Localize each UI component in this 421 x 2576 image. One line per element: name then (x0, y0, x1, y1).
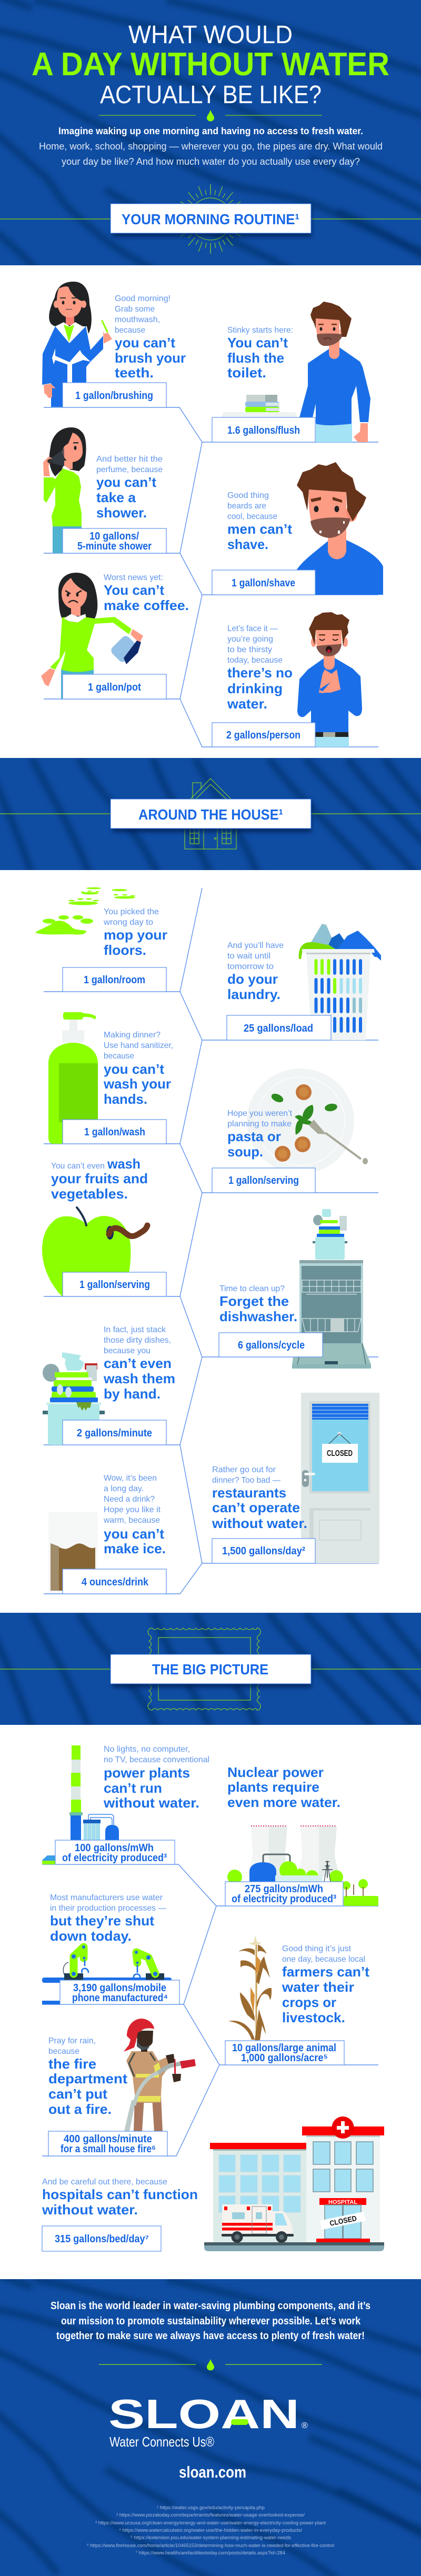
text: mop your floors (103, 907, 167, 958)
heading: around the house (111, 799, 311, 828)
text: take a shower: And better hit the (96, 455, 163, 464)
box: 1 gallon per serving, fruit: 1 gallon/serving (79, 1279, 150, 1291)
title: A DAY WITHOUT WATER (32, 46, 389, 83)
logo: Sloan: ® (302, 2421, 308, 2430)
text: restaurants can't operate: without water. (212, 1515, 307, 1531)
text: fire department: the fire (48, 2056, 96, 2072)
illustration: man with patchy beard (293, 462, 383, 595)
divider with water drop (99, 2359, 322, 2371)
illustration: man with toilet tank and books (222, 302, 370, 442)
text: brush your teeth (115, 294, 186, 381)
text: wash dishes by hand: wash them (103, 1371, 175, 1386)
illustration: dried corn stalk (228, 1935, 272, 2041)
box: 2 gallons per person: 2 gallons/person (226, 730, 300, 741)
text: flush the toilet: flush the (227, 350, 284, 366)
text: forget the dishwasher: dishwasher. (219, 1309, 297, 1324)
text: restaurants can't operate (212, 1465, 307, 1531)
text: men can't shave: beards are (227, 502, 266, 511)
connector lines (44, 888, 378, 1594)
text: hospitals can't function: And be careful out there, because (42, 2178, 167, 2186)
box: 4 ounces per drink (63, 1569, 166, 1594)
text: fire department: can’t put (48, 2086, 107, 2102)
intro text (39, 126, 383, 167)
text: no drinking water: you’re going (227, 635, 273, 644)
text: nuclear plants: plants require (227, 1779, 319, 1795)
box: 315 gallons per bed per day (42, 2226, 161, 2251)
box: 400 gallons per minute (48, 2131, 167, 2156)
text: no drinking water (227, 624, 293, 712)
text: mop your floors: wrong day to (103, 918, 153, 927)
text: fire department: Pray for rain, (48, 2036, 96, 2045)
panel: footer (0, 2274, 421, 2576)
closing statement: Sloan is the world leader in water-saving plumbing components, and it’s (51, 2300, 370, 2312)
text: brush your teeth: brush your (115, 350, 186, 366)
text: brush your teeth: teeth. (115, 365, 154, 381)
footnote sources: ¹ https://water.usgs.gov/edu/activity-percapita.php (157, 2505, 265, 2511)
illustration: closed hospital and ambulance: CLOSED (329, 2214, 357, 2228)
text: restaurants can't operate: can’t operate (212, 1500, 300, 1515)
text: do your laundry: And you’ll have (227, 941, 284, 950)
text: restaurants can't operate: restaurants (212, 1485, 286, 1501)
box: 1 gallon per serving, fruit (63, 1272, 166, 1296)
illustration: woman with perfume (43, 427, 86, 553)
box: 100 gallons per mWh: of electricity produced³ (62, 1852, 167, 1864)
box: 1 gallon per room: 1 gallon/room (84, 974, 145, 986)
text: fire department: out a fire. (48, 2101, 112, 2117)
connector lines (44, 407, 378, 747)
text: power plants can't run: without water. (103, 1795, 199, 1811)
text: power plants can't run (103, 1745, 209, 1811)
text: can't make ice: make ice. (104, 1541, 166, 1556)
text: wash fruit and vegetables: vegetables. (51, 1186, 128, 1202)
text: flush the toilet (227, 326, 293, 381)
box: 2 gallons per minute: 2 gallons/minute (77, 1427, 152, 1439)
box: 4 ounces per drink: 4 ounces/drink (82, 1576, 149, 1588)
footnote sources: ³ https://www.ucsusa.org/clean-energy/energy-and-water-use/water-energy-electricity-cooling-power-plant (95, 2520, 326, 2526)
text: no drinking water: drinking (227, 681, 283, 696)
box: 3,190 gallons per phone (60, 1980, 179, 2004)
panel: the big picture banner (0, 1613, 421, 1729)
footnote sources: ⁴ https://www.watercalculator.org/water-use/the-hidden-water-in-everyday-products/ (119, 2528, 302, 2533)
text: hospitals can't function (42, 2178, 198, 2218)
illustration: dishwasher (292, 1209, 371, 1369)
text: take a shower (96, 455, 163, 521)
text: manufacturers shut down: Most manufacturers use water (50, 1893, 163, 1902)
text: do your laundry: laundry. (227, 986, 280, 1002)
illustration: stack of dirty dishes in pot (43, 1352, 105, 1445)
box: 2 gallons per minute (63, 1420, 166, 1445)
footnote sources: ⁵ https://extension.psu.edu/water-system-planning-estimating-water-needs (131, 2535, 291, 2541)
logo: Sloan: Water Connects Us® (109, 2434, 214, 2450)
text: no drinking water: Let’s face it — (227, 624, 278, 633)
footnote sources: ⁶ https://www.firehouse.com/home/article/10465153/determining-how-much-water-is-needed-for-effective-fire-control (87, 2543, 334, 2549)
text: flush the toilet: toilet. (227, 365, 266, 381)
box: 1 gallon per pot: 1 gallon/pot (88, 682, 141, 693)
box: 275 gallons per mWh: of electricity produced³ (232, 1893, 336, 1905)
footnote sources: ⁷ https://www.healthcarefacilitiestoday.com/posts/details.aspx?id=284 (136, 2550, 285, 2556)
text: flush the toilet: You can’t (227, 335, 288, 351)
title (32, 21, 389, 109)
box: 1.6 gallons per flush: 1.6 gallons/flush (227, 425, 300, 436)
illustration: nuclear power plant (227, 1826, 378, 1906)
text: no drinking water: to be thirsty (227, 645, 272, 654)
text: make coffee: Worst news yet: (104, 573, 163, 582)
box: 1 gallon per serving, pasta: 1 gallon/serving (228, 1175, 299, 1186)
text: power plants can't run: No lights, no computer, (104, 1745, 190, 1754)
text: do your laundry: do your (227, 971, 278, 987)
box: 1 gallon per shave (212, 570, 315, 595)
box: 1 gallon per brushing: 1 gallon/brushing (75, 390, 153, 402)
text: wash dishes by hand: In fact, just stack (104, 1325, 166, 1334)
text: wash your hands: because (104, 1052, 134, 1061)
text: wash your hands: Use hand sanitizer, (104, 1041, 173, 1050)
text: wash your hands (103, 1031, 173, 1107)
box: 1.6 gallons per flush (212, 417, 315, 442)
illustration: laundry basket (299, 924, 381, 1040)
box: 1,500 gallons per day (212, 1539, 315, 1563)
text: can't make ice: warm, because (103, 1516, 160, 1525)
text: nuclear plants: even more water. (227, 1794, 340, 1810)
text: can't make ice: Need a drink? (104, 1495, 155, 1504)
icon: muddy paw prints (35, 887, 135, 935)
illustration: closed restaurant door: CLOSED (327, 1449, 353, 1458)
panel: the big picture (42, 1745, 384, 2251)
text: power plants can't run: power plants (104, 1765, 190, 1781)
text: restaurants can't operate: Rather go out for (212, 1465, 276, 1474)
text: can't make ice: a long day. (104, 1484, 144, 1493)
text: hospitals can't function: hospitals can’t function (42, 2186, 198, 2202)
illustration: soap dispenser (48, 1012, 98, 1144)
box: 275 gallons per mWh (225, 1882, 343, 1906)
text: no drinking water: there’s no (227, 665, 293, 681)
box: 1 gallon per brushing (63, 383, 166, 407)
text: mop your floors: You picked the (104, 907, 159, 916)
box: 3,190 gallons per phone: 3,190 gallons/mobile (73, 1982, 166, 1994)
title: ACTUALLY BE LIKE? (100, 81, 322, 109)
text: pasta or soup (227, 1109, 293, 1160)
text: wash fruit and vegetables (51, 1156, 148, 1202)
box: 10 gallons per animal: 10 gallons/large animal (232, 2042, 336, 2054)
text: men can't shave: men can’t (227, 521, 292, 537)
text: can't make ice: Wow, it’s been (104, 1474, 157, 1483)
text: brush your teeth: Grab some (115, 305, 155, 314)
text: fire department: because (48, 2047, 79, 2056)
title: WHAT WOULD (128, 21, 293, 49)
text: fire department: department (48, 2071, 127, 2086)
heading: the big picture: THE BIG PICTURE (152, 1661, 268, 1678)
text: men can't shave (227, 491, 292, 552)
text: farmers can't water: water their (282, 1979, 354, 1995)
text: brush your teeth: mouthwash, (115, 315, 160, 324)
text: no drinking water: water. (227, 696, 267, 712)
text: power plants can't run: no TV, because conventional (104, 1755, 209, 1764)
text: farmers can't water: crops or (282, 1994, 336, 2010)
text: wash dishes by hand: can’t even (104, 1355, 172, 1371)
box: 315 gallons per bed per day: 315 gallons/bed/day⁷ (55, 2233, 149, 2245)
closing statement (51, 2300, 370, 2342)
icon: house (185, 778, 236, 849)
divider with water drop (99, 110, 322, 122)
box: 1 gallon per pot (63, 674, 166, 699)
heading: around the house: AROUND THE HOUSE¹ (138, 806, 283, 823)
box: 100 gallons per mWh (55, 1840, 175, 1864)
text: take a shower: perfume, because (96, 465, 163, 474)
footnote sources (87, 2505, 334, 2556)
text: forget the dishwasher: Time to clean up? (219, 1284, 285, 1293)
box: 1 gallon per shave: 1 gallon/shave (232, 577, 295, 589)
text: nuclear plants: Nuclear power (227, 1764, 324, 1780)
text: restaurants can't operate: dinner? Too bad — (212, 1476, 280, 1485)
icon: sun (181, 184, 240, 254)
heading: the big picture (111, 1654, 311, 1684)
box: 1,500 gallons per day: 1,500 gallons/day² (222, 1545, 305, 1557)
text: pasta or soup: soup. (227, 1144, 263, 1160)
text: nuclear plants (227, 1764, 340, 1810)
box: 10 gallons per shower: 5-minute shower (77, 541, 152, 552)
text: farmers can't water: one day, because local (282, 1955, 365, 1964)
text: pasta or soup: pasta or (227, 1129, 281, 1144)
text: forget the dishwasher: Forget the (219, 1293, 289, 1309)
footnote sources: ² https://www.pizzatoday.com/departments/features/water-usage-overlooked-expense/ (116, 2512, 305, 2518)
logo: Sloan (108, 2391, 308, 2450)
box: 400 gallons per minute: for a small house fire⁶ (61, 2143, 156, 2155)
text: farmers can't water: Good thing it’s just (282, 1944, 352, 1953)
text: wash your hands: wash your (103, 1076, 171, 1092)
text: fire department (48, 2036, 127, 2117)
text: wash fruit and vegetables: You can’t even (51, 1162, 105, 1171)
heading: your morning routine: YOUR MORNING ROUTINE¹ (122, 211, 299, 227)
text: wash your hands: you can’t (104, 1061, 164, 1077)
heading: your morning routine (111, 204, 311, 233)
text: mop your floors: mop your (104, 927, 167, 943)
illustration: power plant (42, 1745, 119, 1864)
text: wash dishes by hand: those dirty dishes, (104, 1336, 171, 1345)
illustration: closed restaurant door (301, 1393, 379, 1563)
intro text: Home, work, school, shopping — wherever you go, the pipes are dry. What would (39, 141, 383, 152)
closing statement: together to make sure we always have access to plenty of fresh water! (56, 2330, 365, 2342)
illustration: closed hospital and ambulance (204, 2116, 384, 2251)
box: 1 gallon per wash (63, 1120, 166, 1144)
connector lines (42, 1864, 378, 2156)
box: 2 gallons per person (212, 723, 315, 747)
text: do your laundry: to wait until (227, 952, 270, 961)
website: sloan.com (179, 2463, 246, 2481)
text: make coffee: You can’t (104, 582, 164, 598)
panel: header (0, 0, 421, 265)
text: wash fruit and vegetables: wash (107, 1156, 141, 1172)
box: 10 gallons per animal: 1,000 gallons/acre⁵ (241, 2052, 328, 2064)
text: power plants can't run: can’t run (104, 1780, 162, 1796)
text: wash your hands: Making dinner? (104, 1031, 161, 1040)
text: wash dishes by hand: because you (104, 1346, 151, 1355)
box: 275 gallons per mWh: 275 gallons/mWh (245, 1883, 323, 1895)
panel: around the house banner (0, 758, 421, 874)
text: forget the dishwasher (219, 1284, 297, 1324)
text: farmers can't water: livestock. (282, 2010, 345, 2025)
illustration: factory robot arms (42, 1945, 172, 2004)
illustration: firefighter (124, 2019, 196, 2131)
text: mop your floors: floors. (104, 942, 146, 958)
box: 1 gallon per wash: 1 gallon/wash (84, 1126, 145, 1138)
text: men can't shave: cool, because (227, 512, 277, 521)
closing statement: our mission to promote sustainability wherever possible. Let’s work (61, 2315, 361, 2327)
box: 10 gallons per shower: 10 gallons/ (89, 531, 139, 542)
intro text: your day be like? And how much water do you actually use every day? (62, 156, 360, 167)
illustration: angry woman with empty coffee pot (41, 573, 143, 699)
text: men can't shave: Good thing (227, 491, 269, 500)
text: men can't shave: shave. (227, 536, 268, 552)
box: 1 gallon per room (63, 967, 166, 992)
text: hospitals can't function: without water. (42, 2202, 138, 2218)
text: manufacturers shut down: but they’re shut (50, 1913, 154, 1929)
illustration: thirsty man (297, 612, 362, 747)
logo: Sloan: SLOAN (108, 2391, 299, 2437)
text: brush your teeth: Good morning! (115, 294, 171, 303)
panel: morning routine (41, 282, 383, 747)
text: can't make ice: Hope you like it (104, 1505, 161, 1514)
text: manufacturers shut down: in their production processes — (50, 1904, 166, 1913)
text: pasta or soup: planning to make (227, 1120, 292, 1129)
text: take a shower: shower. (96, 505, 147, 521)
text: take a shower: take a (96, 490, 136, 505)
box: 10 gallons per animal (225, 2041, 344, 2065)
illustration: woman brushing teeth (42, 282, 112, 407)
text: wash dishes by hand (103, 1325, 175, 1402)
box: 1 gallon per serving, pasta (212, 1168, 315, 1193)
text: brush your teeth: you can’t (115, 335, 175, 351)
text: make coffee (104, 573, 189, 613)
illustration: apple with worm (42, 1207, 147, 1296)
illustration: glass of warm drink (48, 1512, 98, 1593)
text: farmers can't water (282, 1944, 369, 2025)
text: manufacturers shut down: down today. (50, 1928, 132, 1944)
box: 3,190 gallons per phone: phone manufactured⁴ (72, 1992, 168, 2004)
box: 100 gallons per mWh: 100 gallons/mWh (75, 1842, 154, 1854)
text: wash your hands: hands. (104, 1091, 147, 1107)
text: pasta or soup: Hope you weren’t (227, 1109, 293, 1118)
box: 25 gallons per load (227, 1015, 331, 1040)
box: 6 gallons per cycle: 6 gallons/cycle (238, 1340, 305, 1351)
text: can't make ice (103, 1474, 166, 1556)
text: manufacturers shut down (50, 1893, 166, 1944)
text: make coffee: make coffee. (104, 597, 189, 613)
text: flush the toilet: Stinky starts here: (227, 326, 293, 335)
text: can't make ice: you can’t (104, 1526, 164, 1542)
text: take a shower: you can’t (96, 474, 156, 490)
box: 25 gallons per load: 25 gallons/load (244, 1023, 313, 1034)
icon: picture frame (148, 1628, 260, 1710)
text: no drinking water: today, because (227, 656, 283, 665)
box: 400 gallons per minute: 400 gallons/minute (64, 2133, 152, 2145)
text: do your laundry: tomorrow to (227, 962, 274, 971)
panel: around the house (35, 887, 381, 1594)
illustration: plate of food (247, 1069, 368, 1174)
text: farmers can't water: farmers can’t (282, 1964, 369, 1980)
text: brush your teeth: because (115, 326, 145, 335)
box: 10 gallons per shower (63, 528, 166, 553)
box: 6 gallons per cycle (219, 1333, 323, 1357)
text: wash fruit and vegetables: your fruits and (51, 1171, 148, 1186)
intro text: Imagine waking up one morning and having no access to fresh water. (58, 126, 363, 136)
text: wash dishes by hand: by hand. (104, 1386, 161, 1402)
illustration: closed hospital and ambulance: HOSPITAL (328, 2199, 357, 2205)
text: do your laundry (227, 941, 284, 1002)
